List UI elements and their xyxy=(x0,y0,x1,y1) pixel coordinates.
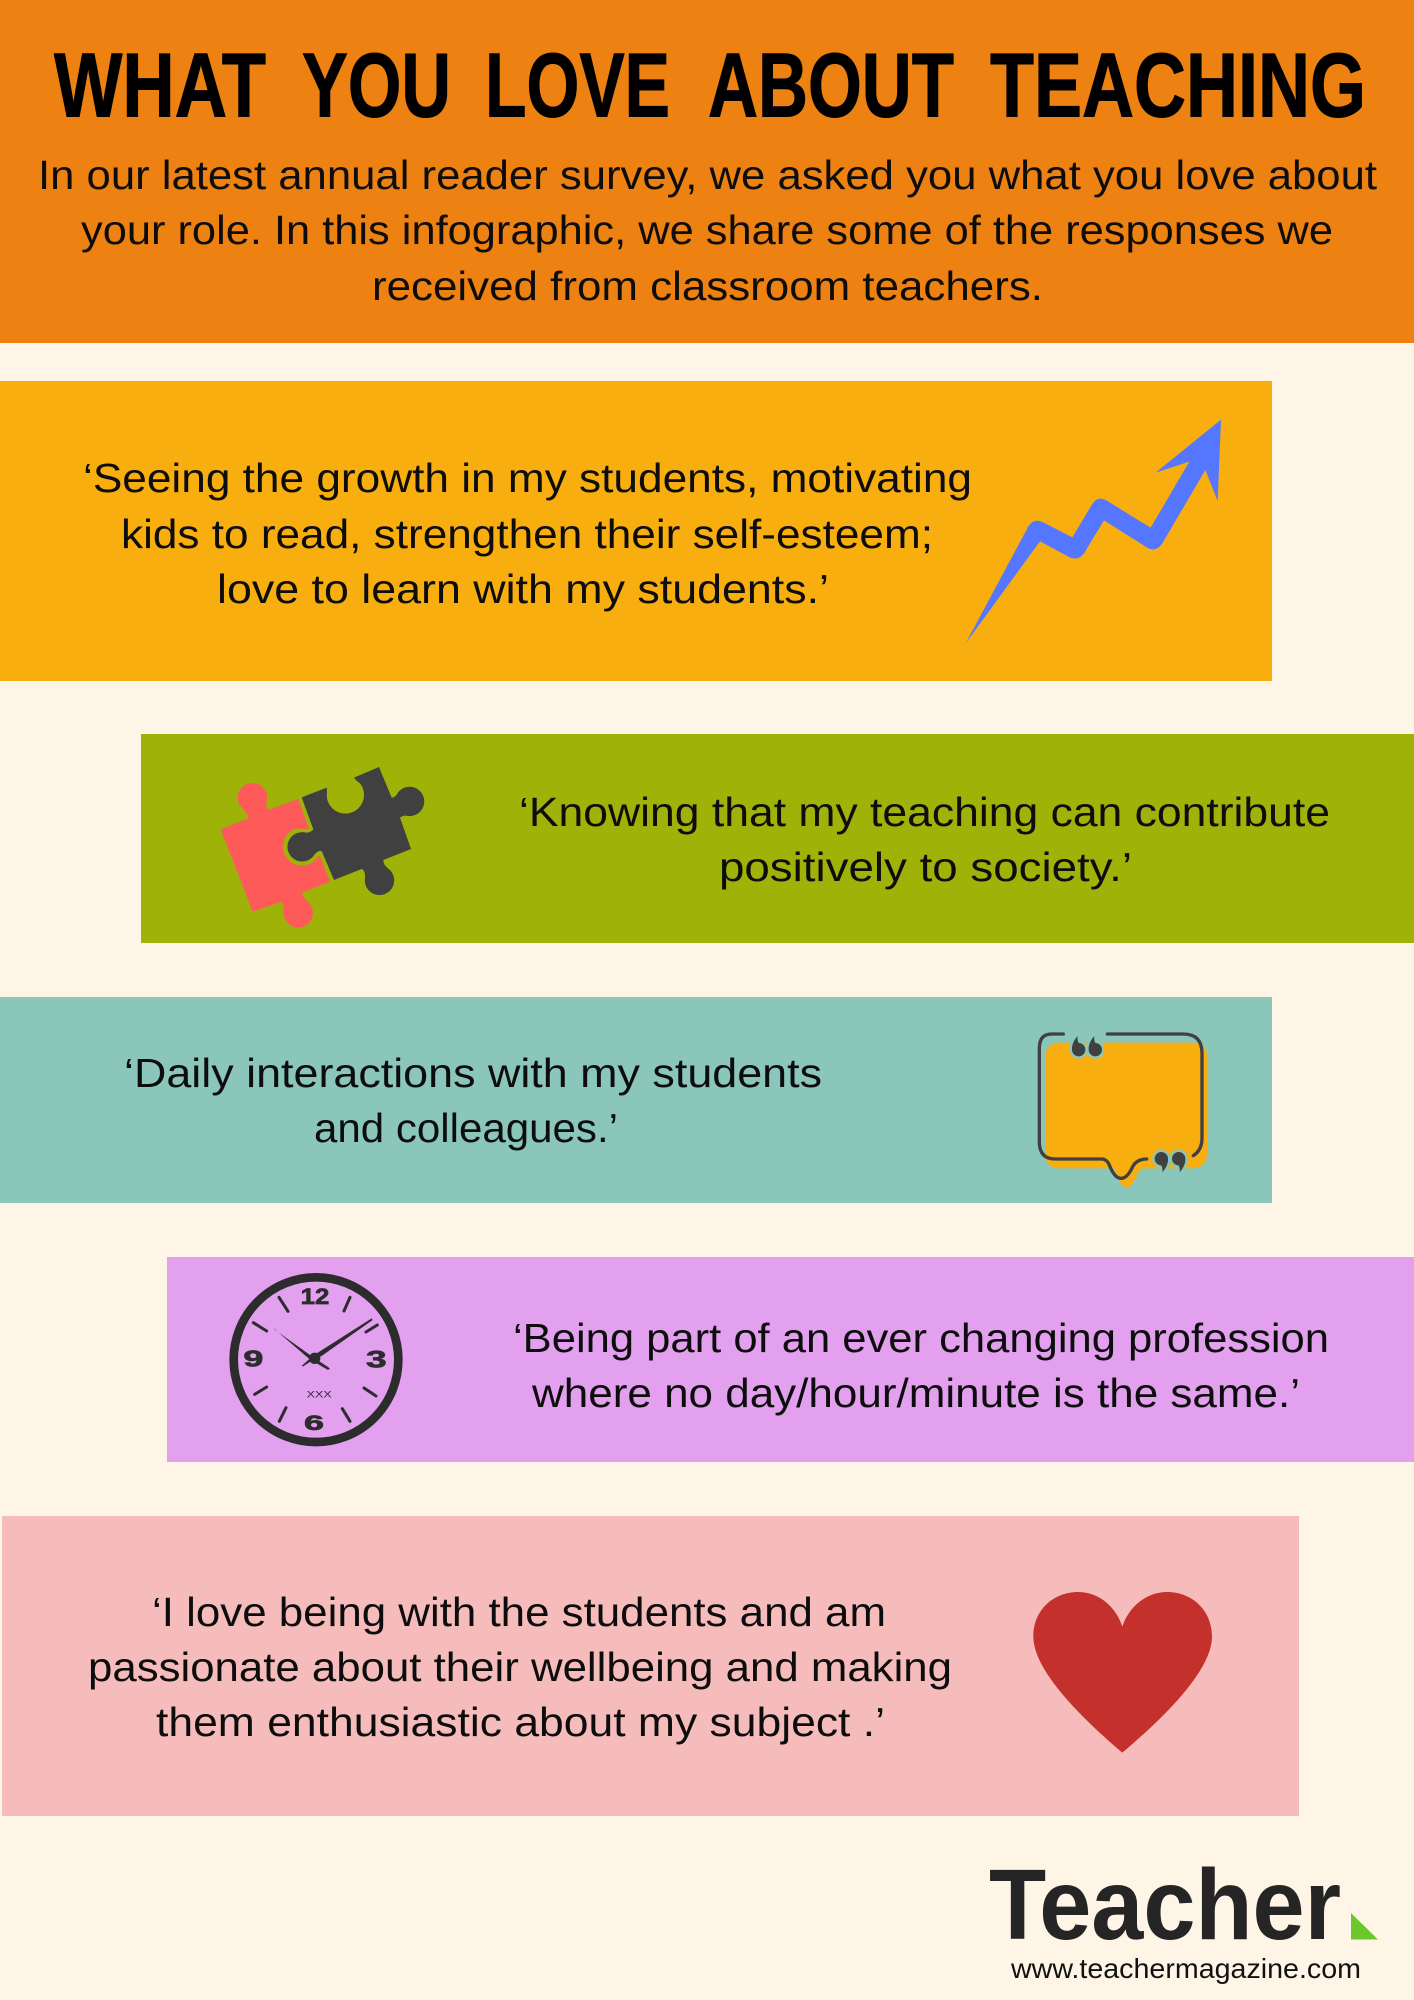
icon: clock: 9 xyxy=(243,1346,263,1372)
title: ABOUT xyxy=(708,36,954,136)
icon: clock: 6 xyxy=(304,1411,324,1435)
title: LOVE xyxy=(485,36,670,136)
title xyxy=(54,36,1366,136)
quote text: growth: love to learn with my students.’ xyxy=(217,566,829,612)
quote text: society xyxy=(519,789,1330,890)
website url: www.teachermagazine.com xyxy=(1010,1953,1361,1984)
quote text: wellbeing: passionate about their wellbeing and making xyxy=(88,1644,952,1690)
quote text: interactions xyxy=(124,1050,822,1151)
quote text: wellbeing xyxy=(88,1589,952,1745)
title: YOU xyxy=(302,36,451,136)
icon: clock: 3 xyxy=(366,1346,387,1373)
quote text: changing profession: ‘Being part of an ever changing profession xyxy=(513,1315,1329,1361)
logo: Teacher magazine: Teacher xyxy=(989,1849,1341,1961)
icon: clock: 12 xyxy=(301,1284,329,1309)
quote text: society: positively to society.’ xyxy=(719,844,1132,890)
quote text: growth: kids to read, strengthen their self-esteem; xyxy=(121,511,933,557)
icon: clock xyxy=(234,1277,398,1442)
quote text: changing profession: where no day/hour/minute is the same.’ xyxy=(531,1370,1300,1416)
icon: puzzle pieces xyxy=(221,767,424,928)
icon: speech bubble xyxy=(1039,1034,1207,1187)
quote text: growth xyxy=(83,455,972,612)
panel: society quote xyxy=(141,734,1414,943)
quote text: changing profession xyxy=(513,1315,1329,1416)
title: WHAT xyxy=(54,36,266,136)
intro text xyxy=(38,152,1378,309)
panel: changing profession quote xyxy=(167,1257,1414,1462)
panel: wellbeing quote xyxy=(2,1516,1299,1816)
quote text: interactions: and colleagues.’ xyxy=(314,1105,618,1151)
panel: header xyxy=(0,0,1414,343)
quote text: society: ‘Knowing that my teaching can contribute xyxy=(519,789,1330,835)
icon: green triangle xyxy=(1351,1913,1378,1940)
intro text: your role. In this infographic, we share some of the responses we xyxy=(81,207,1333,253)
intro text: received from classroom teachers. xyxy=(372,263,1043,309)
quote text: interactions: ‘Daily interactions with my students xyxy=(124,1050,822,1096)
panel: growth quote xyxy=(0,381,1272,681)
intro text: In our latest annual reader survey, we asked you what you love about xyxy=(38,152,1378,198)
icon: clock: XXX xyxy=(307,1389,333,1399)
quote text: growth: ‘Seeing the growth in my students, motivating xyxy=(83,455,972,501)
icon: rising arrow xyxy=(966,420,1221,643)
quote text: wellbeing: them enthusiastic about my subject .’ xyxy=(156,1699,885,1745)
quote text: wellbeing: ‘I love being with the students and am xyxy=(152,1589,886,1635)
panel: interactions quote xyxy=(0,997,1272,1203)
icon: heart xyxy=(1033,1592,1212,1753)
